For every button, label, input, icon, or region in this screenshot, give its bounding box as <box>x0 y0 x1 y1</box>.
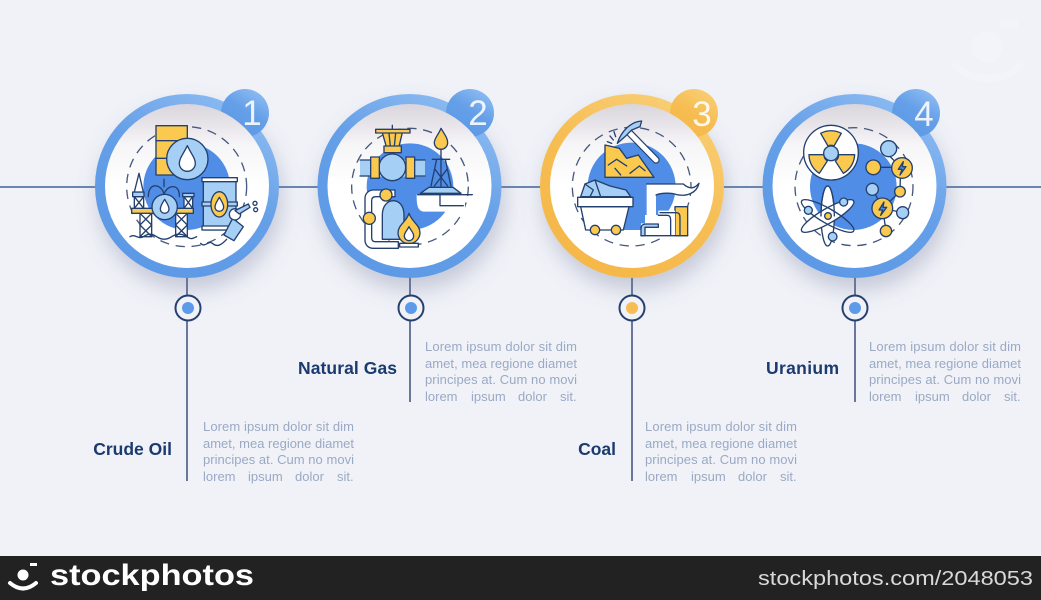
text block 3: ipsum <box>691 469 726 484</box>
heading: uranium: Uranium <box>766 358 839 378</box>
text block 2: Lorem ipsum dolor sit dim <box>425 339 577 354</box>
horizontal timeline <box>0 186 1041 188</box>
node 4 <box>842 296 868 320</box>
panel: uranium <box>762 89 1021 404</box>
badge number 2: 2 <box>468 94 488 133</box>
text block 2: sit. <box>560 389 577 404</box>
text block 1: sit. <box>337 469 354 484</box>
node 1 <box>176 296 200 320</box>
footer image id: stockphotos.com/2048053 <box>758 568 1033 590</box>
icon: gas valve, derrick and tank <box>352 125 472 248</box>
ring 1 <box>95 89 279 278</box>
text block 4: ipsum <box>915 389 950 404</box>
text block 4: amet, mea regione diamet <box>869 356 1021 371</box>
panel: crude oil <box>93 89 354 484</box>
heading: natural gas: Natural Gas <box>298 358 397 378</box>
text block 1: lorem <box>203 469 236 484</box>
connector line 2 <box>409 276 411 402</box>
text block 2: lorem <box>425 389 458 404</box>
text block 1: Lorem ipsum dolor sit dim <box>203 419 354 434</box>
text block 2: principes at. Cum no movi <box>425 372 577 387</box>
text block 3: Lorem ipsum dolor sit dim <box>645 419 797 434</box>
ring 4 <box>762 89 946 278</box>
text block 2: dolor <box>518 389 548 404</box>
watermark logo <box>955 24 1020 79</box>
text block 2: amet, mea regione diamet <box>425 356 577 371</box>
text block 1: principes at. Cum no movi <box>203 452 354 467</box>
connector line 1 <box>186 276 188 481</box>
text block 1: amet, mea regione diamet <box>203 436 354 451</box>
badge number 3: 3 <box>692 95 712 134</box>
text block 1 <box>203 419 354 484</box>
text block 3 <box>645 419 797 484</box>
text block 3: dolor <box>738 469 768 484</box>
text block 4: dolor <box>962 389 992 404</box>
panel: natural gas <box>298 89 577 404</box>
text block 1: dolor <box>295 469 325 484</box>
text block 4: principes at. Cum no movi <box>869 372 1021 387</box>
connector line 3 <box>631 276 633 481</box>
footer brand name: stockphotos <box>50 559 254 592</box>
text block 2: ipsum <box>471 389 506 404</box>
heading: coal: Coal <box>578 439 616 459</box>
text block 4: sit. <box>1004 389 1021 404</box>
panel: coal <box>540 89 797 484</box>
footer logo icon <box>10 563 37 588</box>
icon: radiation, atom and energy nodes <box>795 125 913 246</box>
text block 3: sit. <box>780 469 797 484</box>
text block 1: ipsum <box>248 469 283 484</box>
text block 4: lorem <box>869 389 902 404</box>
text block 4 <box>869 339 1021 404</box>
node 3 <box>620 296 644 320</box>
text block 3: principes at. Cum no movi <box>645 452 797 467</box>
ring 2 <box>318 89 502 278</box>
badge number 4: 4 <box>914 95 934 134</box>
icon: oil barrels and rig <box>127 126 258 247</box>
heading: crude oil: Crude Oil <box>93 439 172 459</box>
node 2 <box>398 296 424 320</box>
footer bar <box>0 556 1041 600</box>
text block 2 <box>425 339 577 404</box>
text block 4: Lorem ipsum dolor sit dim <box>869 339 1021 354</box>
icon: coal mine cart and pickaxe <box>572 121 699 246</box>
connector line 4 <box>854 276 856 402</box>
text block 3: amet, mea regione diamet <box>645 436 797 451</box>
text block 3: lorem <box>645 469 678 484</box>
badge number 1: 1 <box>242 94 262 133</box>
ring 3 <box>540 89 724 278</box>
